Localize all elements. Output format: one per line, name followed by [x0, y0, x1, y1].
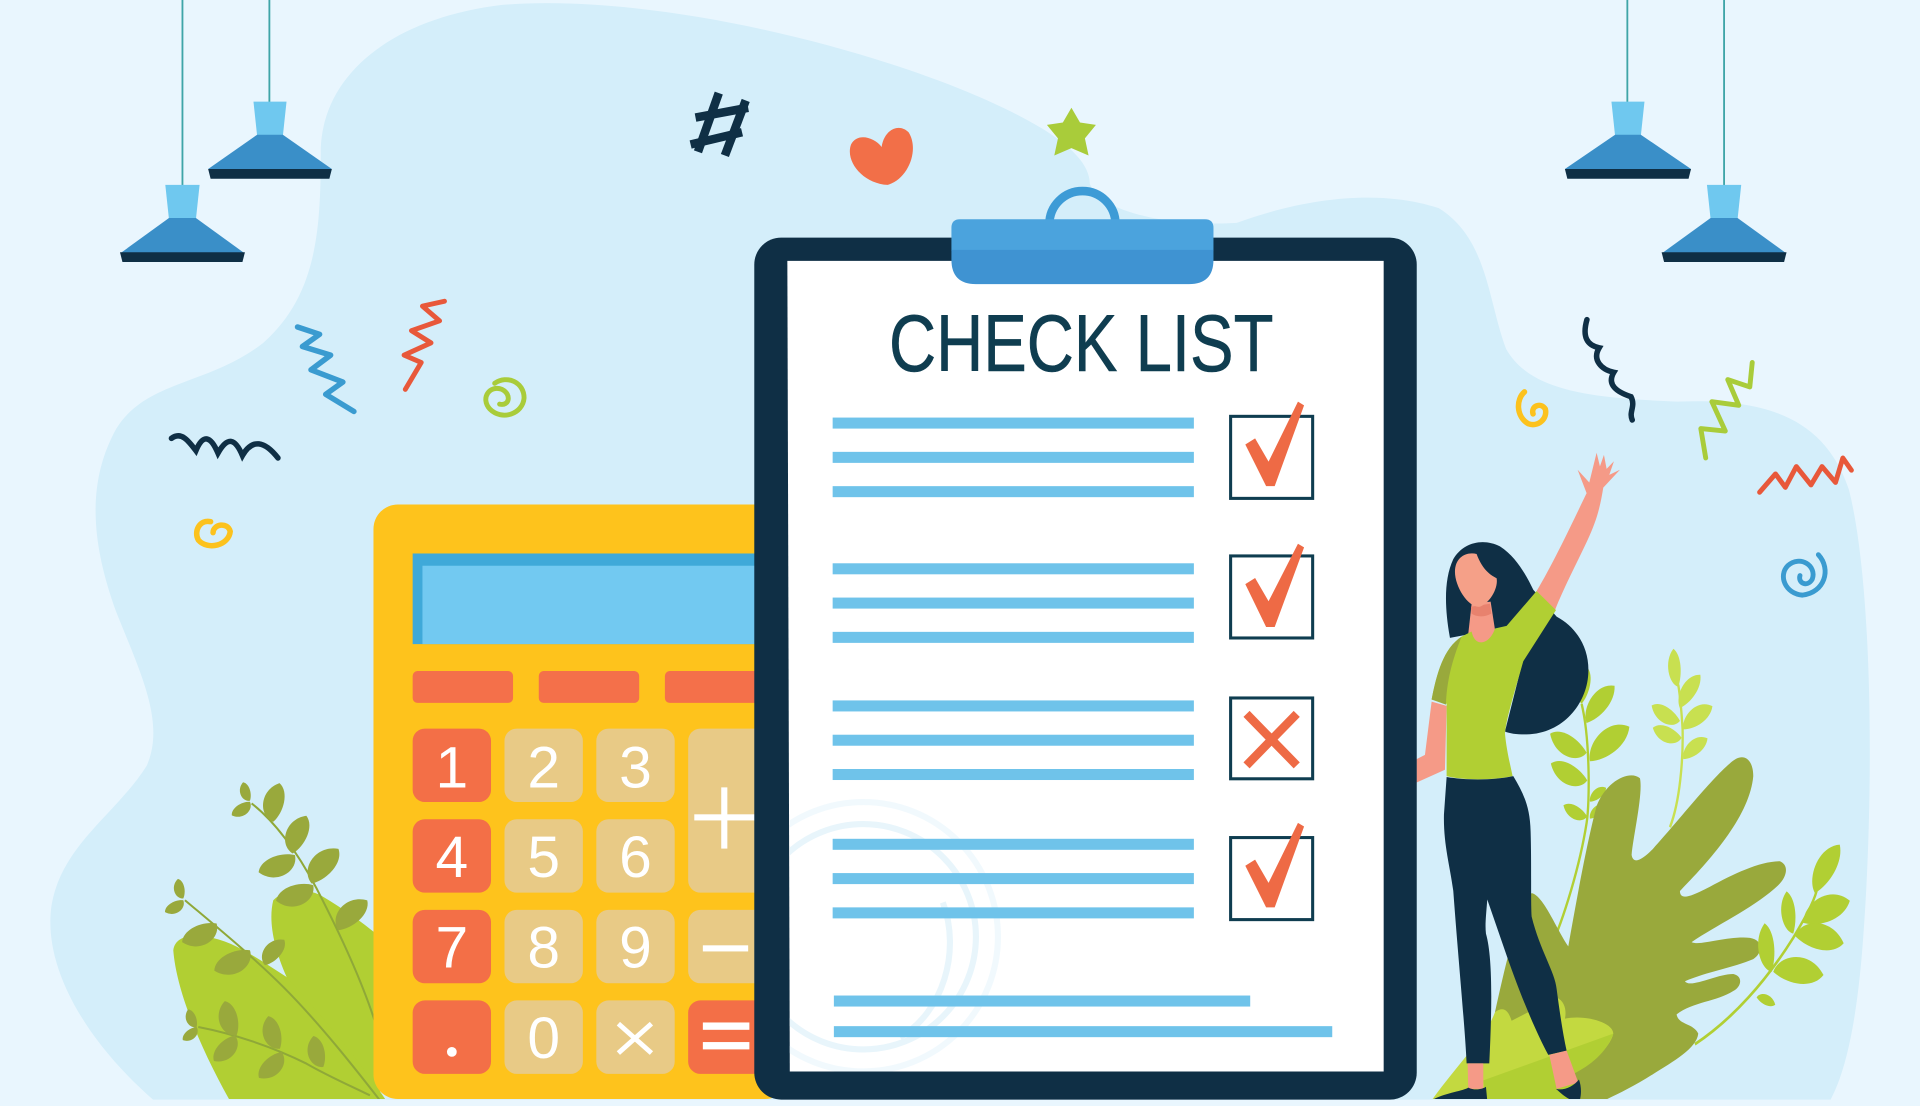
number keys — [413, 729, 774, 1074]
key labels: 6 — [619, 825, 652, 890]
icon: hash sign — [691, 93, 748, 156]
key labels: 8 — [527, 915, 560, 980]
woman — [1417, 453, 1620, 1102]
shirt sleeve shadow — [1432, 637, 1462, 705]
key labels: 2 — [527, 735, 560, 800]
raised arm — [1537, 453, 1620, 610]
lowered arm — [1417, 702, 1447, 783]
key labels: 4 — [435, 825, 468, 890]
plant: right sprig — [1695, 837, 1853, 1044]
text lines: footer — [834, 996, 1332, 1037]
function keys — [413, 671, 775, 703]
neck shadow — [1471, 604, 1491, 616]
swirl: yellow right — [1518, 392, 1546, 425]
swirl: yellow left — [197, 521, 230, 546]
squiggle: orange right — [1760, 458, 1851, 492]
clipboard — [729, 191, 1417, 1100]
key labels: 1 — [435, 735, 468, 800]
checkbox 4: checked — [1231, 823, 1313, 920]
paper sheet — [787, 261, 1384, 1071]
sprigs behind large plant — [1546, 648, 1715, 948]
ankles — [1468, 1051, 1578, 1089]
plant: large dark leaf — [1495, 757, 1786, 1104]
icon: heart — [850, 128, 913, 185]
checkbox 3: crossed — [1231, 698, 1313, 779]
key labels: 7 — [435, 915, 468, 980]
hair — [1446, 542, 1588, 734]
lamp: far right — [1662, 0, 1787, 262]
clip ring — [1049, 191, 1116, 257]
text lines: item 4 — [833, 839, 1194, 918]
lamp: second left — [208, 0, 332, 179]
lamp: far left — [120, 0, 245, 262]
trousers — [1444, 776, 1567, 1063]
text lines: item 3 — [833, 700, 1194, 780]
squiggle: blue — [298, 327, 354, 411]
lamp: second right — [1565, 0, 1691, 179]
text lines: item 1 — [833, 418, 1194, 497]
neck — [1468, 602, 1495, 645]
icon: star — [1047, 108, 1096, 156]
key labels: 5 — [527, 825, 560, 890]
key labels — [435, 735, 652, 1071]
plant: light bottom leaf — [1432, 997, 1613, 1104]
shirt — [1432, 591, 1556, 779]
text lines: item 2 — [833, 563, 1194, 643]
squiggle: black wave — [171, 436, 278, 458]
key symbols — [447, 787, 756, 1057]
shoes — [1434, 1080, 1581, 1099]
key labels: 3 — [619, 735, 652, 800]
sprigs: dark leaves — [163, 780, 380, 1100]
clipboard board — [754, 238, 1417, 1100]
leaf: front large — [173, 936, 388, 1104]
squiggle: orange — [404, 301, 444, 389]
spiral: blue right — [1783, 555, 1825, 595]
checkbox 2: checked — [1231, 544, 1313, 638]
calculator screen — [413, 553, 780, 644]
face — [1455, 553, 1497, 607]
spiral: green — [486, 380, 524, 415]
leaf: back large — [271, 890, 380, 1104]
key labels: 9 — [619, 915, 652, 980]
clip plate — [951, 219, 1213, 284]
calculator body — [373, 505, 790, 1099]
squiggle: green right — [1701, 362, 1752, 458]
plant: left foliage — [163, 780, 388, 1104]
squiggle: black right — [1585, 320, 1633, 420]
title: CHECK LIST — [889, 299, 1273, 389]
key labels: 0 — [527, 1006, 560, 1071]
checkbox 1: checked — [1231, 402, 1313, 498]
plant and woman group — [1417, 453, 1853, 1104]
paper watermark rings — [790, 799, 1001, 1072]
calculator — [373, 505, 790, 1099]
